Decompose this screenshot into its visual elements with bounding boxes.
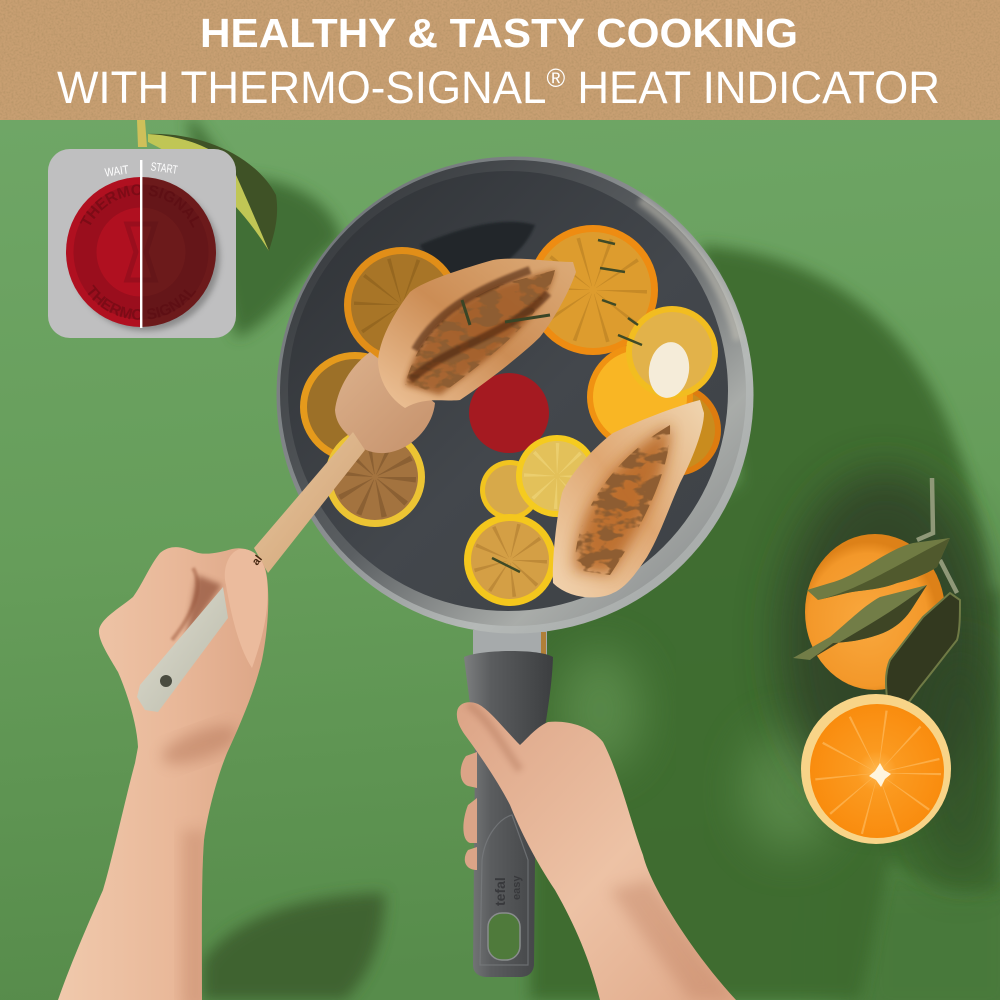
red heat indicator xyxy=(469,373,549,453)
slice rind xyxy=(801,694,951,844)
handle collar xyxy=(473,630,547,656)
slice: top orange xyxy=(528,225,658,355)
chicken breast top xyxy=(378,259,576,408)
disc lettering: THERMO SIGNAL xyxy=(80,184,198,225)
heading line 2: ® xyxy=(546,63,565,93)
disc lettering: THERMO SIGNAL xyxy=(88,284,196,320)
pan cooking surface xyxy=(288,171,728,611)
pan handle: easy xyxy=(511,875,523,900)
left arm shading xyxy=(158,568,242,1000)
butter dollop xyxy=(645,339,693,401)
slice segments xyxy=(845,740,911,806)
slice: left orange xyxy=(300,352,410,462)
leaf 3 xyxy=(886,593,960,725)
stem xyxy=(917,478,957,593)
slice: middle lemon xyxy=(516,435,598,517)
thumb over handle xyxy=(225,549,268,668)
spoon shaft xyxy=(254,432,365,573)
disc: right half start xyxy=(141,177,216,327)
frying pan xyxy=(276,156,754,634)
rim highlight xyxy=(640,200,738,340)
handle hanging hole xyxy=(160,675,172,687)
slice: right orange xyxy=(587,344,693,450)
chicken breast bottom xyxy=(553,400,704,597)
left hand and arm holding spoon xyxy=(58,547,268,1000)
slice: bottom lemon xyxy=(464,514,556,606)
cast shadows on table xyxy=(187,120,1000,1000)
glaze xyxy=(405,270,555,395)
whole orange xyxy=(805,534,945,690)
slice centre xyxy=(869,763,891,787)
leaf 1 dark half xyxy=(818,538,950,600)
spoon handle end xyxy=(137,587,228,712)
handle emboss panel xyxy=(480,815,528,965)
indicator card xyxy=(48,149,236,338)
pan inner wall xyxy=(280,160,746,626)
slice flesh xyxy=(810,704,944,838)
heading line 1: HEALTHY & TASTY COOKING xyxy=(200,10,798,56)
orange half slice xyxy=(801,694,951,844)
orange and lemon slices in pan xyxy=(300,225,721,606)
thyme on slices xyxy=(492,240,642,572)
slice: cooked lemon xyxy=(325,427,425,527)
left arm and hand xyxy=(58,547,268,1000)
pan handle xyxy=(464,630,553,977)
leaf 2 xyxy=(793,585,927,660)
right fingers behind handle xyxy=(461,752,477,870)
handle hole xyxy=(488,913,520,960)
disc: left half wait xyxy=(66,177,141,327)
disc shadow xyxy=(72,183,220,331)
slice: back right orange xyxy=(629,384,721,476)
right hand shading xyxy=(468,704,735,1000)
oil reflections xyxy=(420,222,535,290)
spoon bowl xyxy=(335,352,435,453)
slice: right lemon xyxy=(626,306,718,398)
spoon brand mark: al xyxy=(250,553,265,568)
label wait: WAIT xyxy=(104,162,130,180)
slice: small lemon xyxy=(480,460,540,520)
slice: left top orange xyxy=(344,247,460,363)
right palm and forearm xyxy=(457,702,736,1000)
wooden spoon xyxy=(254,352,435,573)
handle grip xyxy=(464,651,553,977)
label start: START xyxy=(150,159,179,177)
heading line 2: HEAT INDICATOR xyxy=(565,62,940,113)
char band xyxy=(405,270,555,395)
handle embossed brand: tefal xyxy=(492,877,508,906)
right hand and arm holding handle xyxy=(457,702,736,1000)
divider line xyxy=(140,160,142,328)
disc lettering xyxy=(80,184,198,320)
header: cardboard banner xyxy=(0,0,1000,120)
pan outer rim xyxy=(276,156,754,634)
char band xyxy=(575,425,670,575)
leaf 1 xyxy=(807,538,950,600)
leaf and stem top left xyxy=(137,120,277,251)
thyme sprig xyxy=(462,300,550,325)
heading line 2: WITH THERMO-SIGNAL xyxy=(57,62,559,113)
disc emboss ring xyxy=(85,196,197,308)
panel: thermo-signal indicator xyxy=(48,149,236,338)
glaze xyxy=(575,425,670,575)
leaf 2 dark edge xyxy=(810,585,927,660)
whole orange with leaves xyxy=(793,478,960,725)
